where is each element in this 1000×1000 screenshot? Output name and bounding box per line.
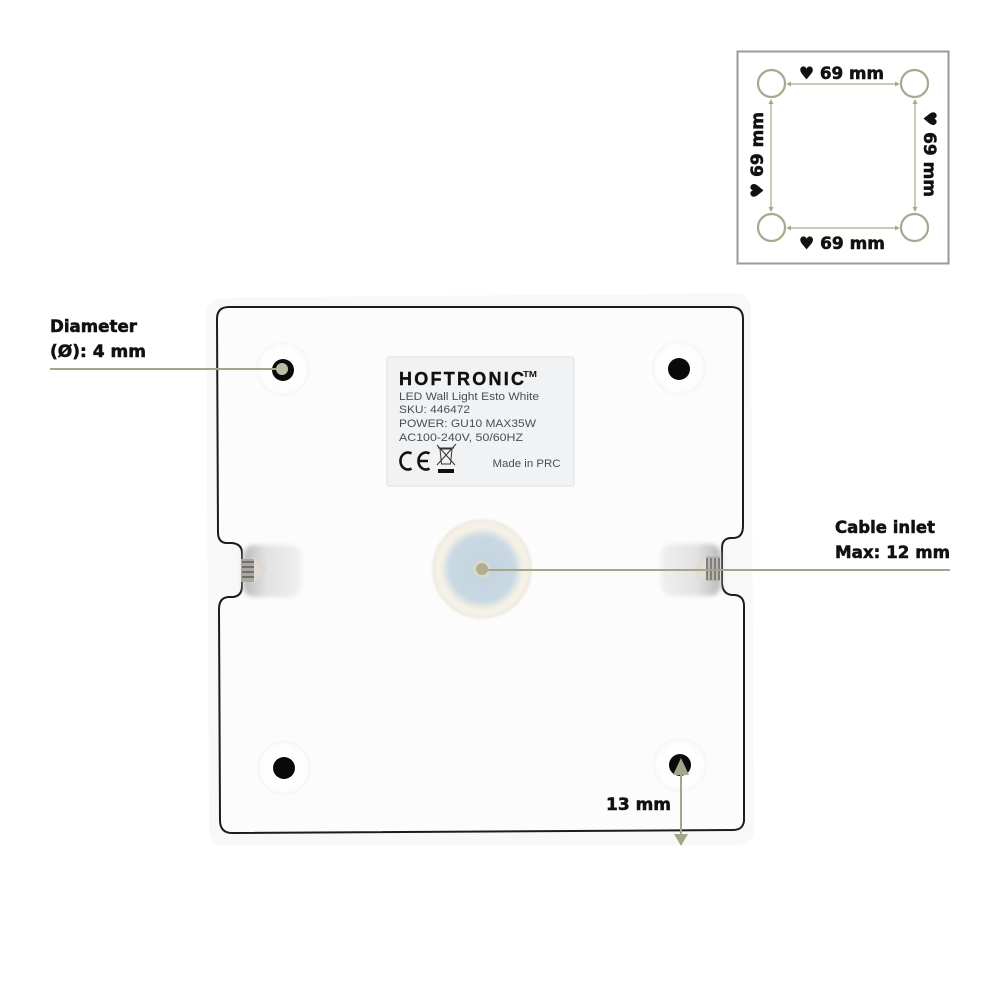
mounting hole: top right: [652, 341, 706, 395]
cable inlet grommet: [432, 520, 532, 618]
icon: CE mark: [400, 453, 430, 470]
specification text: SKU: 446472: [399, 404, 470, 416]
specification text: LED Wall Light Esto White: [399, 391, 539, 403]
icon: WEEE bin: [437, 444, 456, 473]
specification text: [399, 391, 539, 444]
panel: mounting hole diagram: [738, 52, 948, 264]
made in text: Made in PRC: [492, 458, 561, 470]
arrows: hole spacing: [768, 82, 918, 230]
label: left spacing: ♥ 69 mm: [748, 112, 768, 198]
mounting hole: top left: [256, 342, 310, 396]
mounting hole: bottom right: [653, 738, 707, 792]
icon: mounting hole circles: [758, 70, 928, 241]
label: bottom spacing: ♥ 69 mm: [799, 234, 885, 254]
callout: diameter: (Ø): 4 mm: [50, 342, 146, 362]
callout: diameter: Diameter: [50, 317, 138, 337]
mounting hole: bottom left: [257, 741, 311, 795]
callout: 13 mm edge distance: [606, 758, 689, 846]
specification text: AC100-240V, 50/60HZ: [399, 432, 523, 444]
trademark: TM: [523, 370, 537, 379]
screw: left side: [241, 545, 301, 597]
callout: cable inlet: Max: 12 mm: [835, 543, 950, 563]
label: top spacing: ♥ 69 mm: [799, 64, 884, 84]
label: right spacing: ♥ 69 mm: [919, 111, 939, 197]
panel: back plate of wall light: [206, 293, 754, 846]
screw: right side: [661, 544, 721, 596]
product label: [387, 357, 574, 486]
callout: cable inlet: [476, 518, 950, 575]
specification text: POWER: GU10 MAX35W: [399, 418, 537, 430]
brand name: HOFTRONIC: [399, 369, 524, 389]
callout: diameter: [50, 317, 288, 375]
callout: cable inlet: Cable inlet: [835, 518, 935, 538]
callout: 13 mm edge distance: 13 mm: [606, 795, 671, 815]
